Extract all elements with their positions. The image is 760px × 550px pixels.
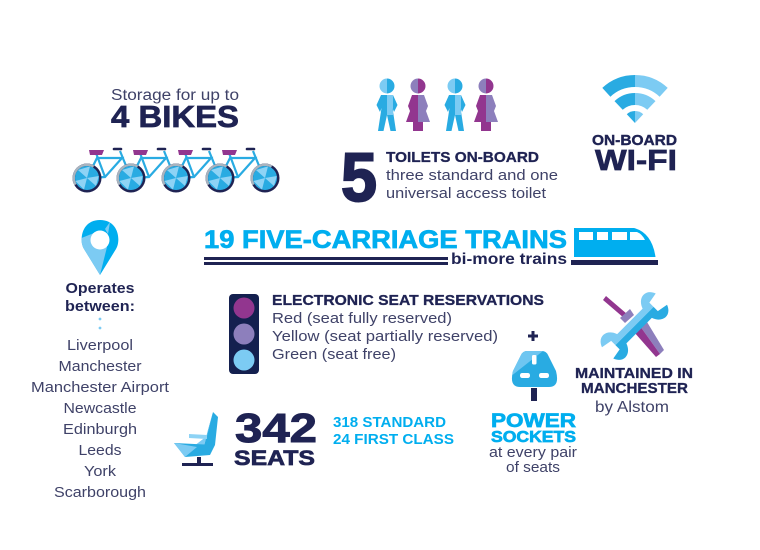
text: reservation colours: Green (seat free) (272, 346, 396, 363)
text: toilets detail (386, 167, 558, 202)
text: seat classes: 318 STANDARD (333, 415, 446, 431)
label: seats: SEATS (234, 446, 315, 470)
icon: plus (528, 331, 538, 341)
text: at every pair of seats (489, 444, 577, 476)
heading: 4 bikes: 4 BIKES (111, 99, 239, 134)
icon: traffic light (229, 294, 259, 374)
text: storage for up to: Storage for up to (111, 87, 239, 104)
list: stations: Edinburgh (63, 421, 137, 438)
text: at every pair of seats: at every pair (489, 444, 577, 461)
icon: toilet figures (376, 78, 498, 131)
heading: 19 five-carriage trains: 19 FIVE-CARRIAGE TRAINS (204, 226, 567, 254)
heading: maintained in manchester: MANCHESTER (581, 381, 689, 397)
icon: wi-fi (602, 75, 668, 123)
list: stations: Manchester (58, 358, 142, 375)
list: stations: Liverpool (67, 337, 133, 354)
text: reservation colours (272, 310, 498, 363)
text: reservation colours: Yellow (seat partially reserved) (272, 328, 498, 345)
panel: power sockets (489, 331, 577, 476)
heading: operates between (65, 280, 135, 315)
icon: plug (512, 351, 557, 401)
text: reservation colours: Red (seat fully reserved) (272, 310, 452, 327)
list: stations: Newcastle (64, 400, 136, 417)
text: bi-more trains: bi-more trains (451, 251, 567, 268)
dots (99, 318, 101, 329)
icon: location pin (81, 220, 118, 275)
text: toilets detail: universal access toilet (386, 185, 547, 202)
panel: trains banner (204, 226, 658, 268)
icon: crossed tools (597, 288, 672, 364)
number: 342: 342 (235, 405, 317, 451)
panel: toilets (341, 78, 558, 216)
heading: wi-fi: WI-FI (595, 145, 677, 177)
heading: power sockets: SOCKETS (491, 429, 576, 446)
text: by alstom: by Alstom (595, 399, 669, 416)
text: on-board: ON-BOARD (592, 133, 677, 149)
panel: seat reservations (229, 293, 544, 374)
text: seat classes (333, 415, 454, 448)
heading: operates between: between: (65, 298, 135, 315)
list: stations: Manchester Airport (31, 379, 170, 396)
list: stations: York (84, 463, 117, 480)
icon: row of bikes (72, 149, 280, 192)
text: seat classes: 24 FIRST CLASS (333, 432, 454, 448)
text: at every pair of seats: of seats (506, 459, 560, 476)
panel: seats (174, 405, 454, 470)
icon: seat (174, 412, 218, 466)
icon: train (574, 228, 656, 257)
number: 5: 5 (341, 139, 377, 216)
heading: operates between: Operates (66, 280, 134, 297)
heading: power sockets: POWER (491, 410, 576, 432)
panel: maintenance (575, 288, 693, 416)
heading: maintained in manchester (575, 366, 693, 397)
panel: route (31, 220, 170, 501)
panel: bike storage (72, 87, 280, 192)
heading: toilets on-board: TOILETS ON-BOARD (386, 150, 539, 166)
list: stations (31, 337, 170, 501)
list: stations: Scarborough (54, 484, 146, 501)
list: stations: Leeds (78, 442, 122, 459)
text: toilets detail: three standard and one (386, 167, 558, 184)
heading: power sockets (491, 410, 576, 446)
heading: maintained in manchester: MAINTAINED IN (575, 366, 693, 382)
panel: wi-fi (592, 75, 677, 177)
heading: electronic seat reservations: ELECTRONIC SEAT RESERVATIONS (272, 293, 544, 309)
double rule (204, 257, 658, 265)
